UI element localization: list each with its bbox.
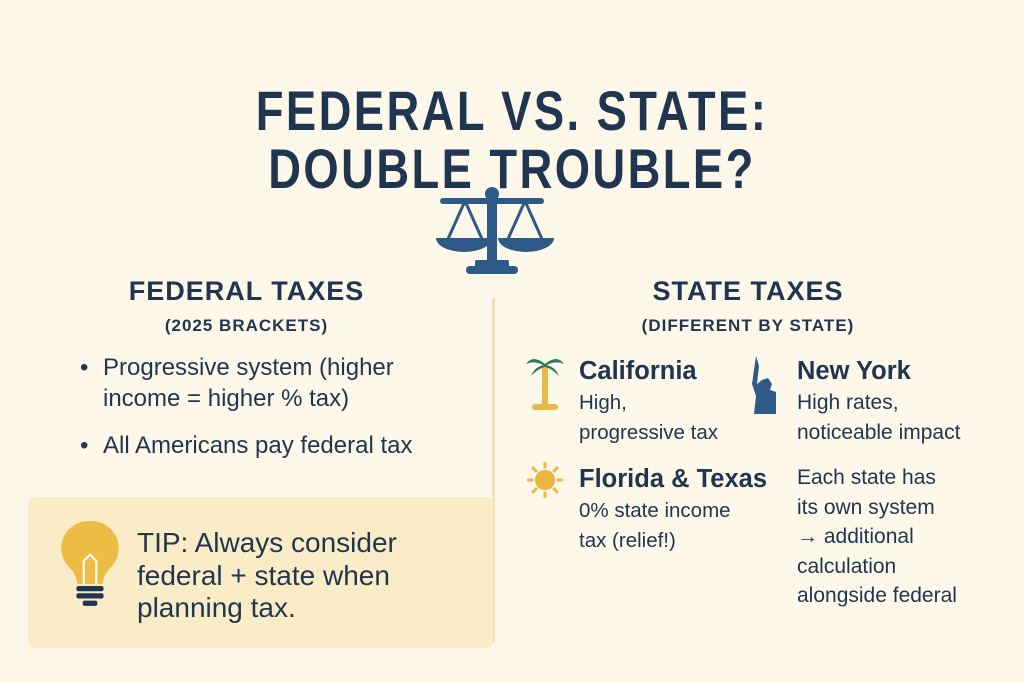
- bullets: •: [80, 432, 88, 459]
- florida texas: Florida & Texas: [579, 465, 767, 493]
- california: California: [579, 357, 697, 385]
- divider: [492, 298, 495, 643]
- tip text: [137, 527, 397, 623]
- florida texas: [579, 465, 767, 552]
- title: DOUBLE TROUBLE?: [268, 137, 756, 200]
- note: Each state has: [797, 466, 936, 489]
- title: FEDERAL VS. STATE:: [256, 79, 768, 142]
- icon: scales: [436, 187, 554, 274]
- california: High,: [579, 391, 627, 414]
- panel: tip: [28, 497, 493, 648]
- new york: [797, 357, 960, 444]
- icon: statue of liberty: [752, 356, 776, 414]
- florida texas: tax (relief!): [579, 529, 676, 552]
- bullets: income = higher % tax): [103, 385, 349, 412]
- bullets: [80, 354, 412, 459]
- note: alongside federal: [797, 584, 957, 607]
- note: [797, 466, 957, 607]
- note: its own system: [797, 496, 935, 518]
- panel: state: [526, 276, 960, 607]
- panel: federal: [80, 276, 412, 459]
- new york: High rates,: [797, 391, 899, 414]
- california: progressive tax: [579, 421, 718, 444]
- new york: noticeable impact: [797, 421, 960, 444]
- subheading state: (DIFFERENT BY STATE): [642, 316, 854, 335]
- subheading federal: (2025 BRACKETS): [165, 316, 328, 335]
- florida texas: 0% state income: [579, 499, 731, 522]
- heading state: STATE TAXES: [652, 276, 844, 306]
- title: [256, 79, 768, 200]
- tip text: planning tax.: [137, 592, 296, 623]
- icon: lightbulb: [61, 521, 119, 606]
- bullets: Progressive system (higher: [103, 354, 394, 381]
- new york: New York: [797, 357, 911, 385]
- icon: palm: [526, 359, 564, 410]
- icon: sun: [527, 462, 563, 498]
- note: → additional: [797, 525, 914, 548]
- tip text: TIP: Always consider: [137, 527, 397, 558]
- bullets: •: [80, 354, 88, 381]
- heading federal: FEDERAL TAXES: [129, 276, 364, 306]
- tip text: federal + state when: [137, 560, 390, 590]
- note: calculation: [797, 554, 896, 578]
- bullets: All Americans pay federal tax: [103, 432, 412, 459]
- california: [579, 357, 718, 444]
